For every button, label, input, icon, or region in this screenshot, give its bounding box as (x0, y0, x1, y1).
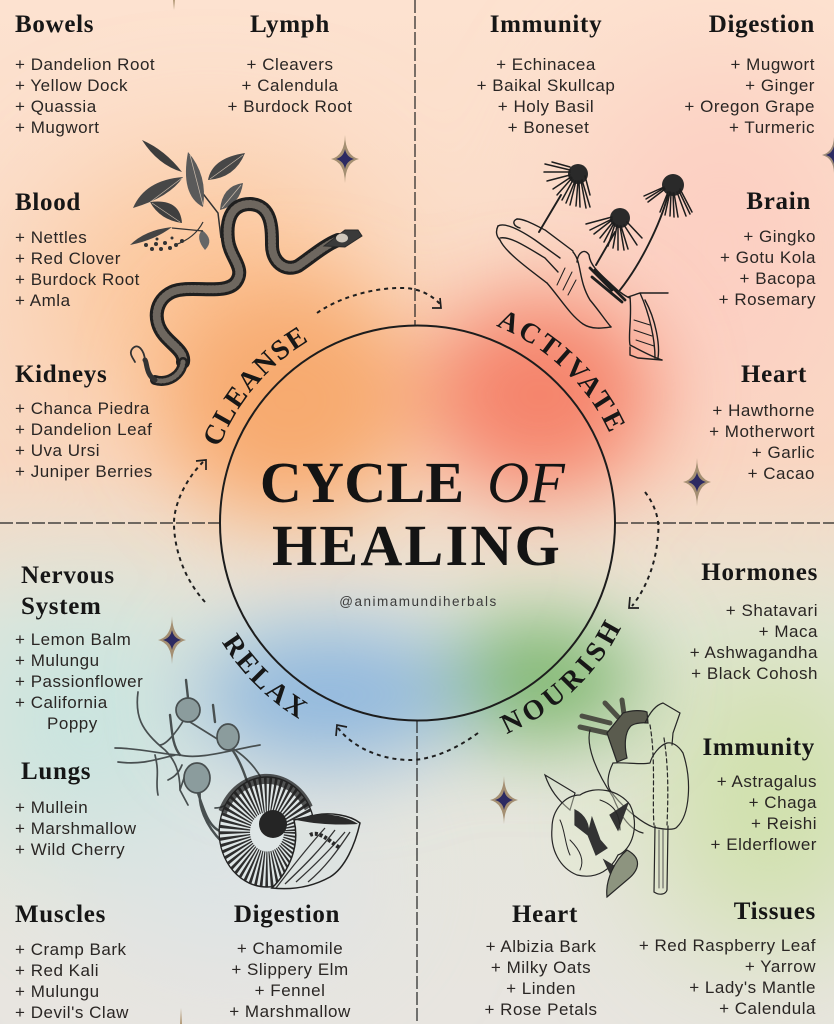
text block: blood: + Red Clover (15, 248, 121, 268)
title: HEALING (272, 513, 562, 578)
text block: nervous system: Nervous (21, 562, 115, 589)
text block: immunity: Immunity (490, 11, 602, 38)
text block: muscles: + Mulungu (15, 982, 100, 1000)
label: nourish: NOURISH (499, 619, 622, 734)
icon: leafy sprig (130, 140, 245, 251)
text block: digestion: + Marshmallow (229, 1002, 351, 1020)
text block: hormones: Hormones (701, 559, 818, 586)
text block: heart: + Garlic (752, 442, 815, 462)
text block: heart: + Rose Petals (484, 1000, 598, 1018)
text block: hormones: + Maca (759, 622, 818, 640)
text block: blood (15, 189, 140, 310)
text block: brain (719, 188, 816, 308)
text block: digestion: + Ginger (745, 76, 815, 95)
title (260, 450, 565, 578)
text block: bowels (15, 11, 155, 137)
text block: blood: + Nettles (15, 228, 87, 246)
text block: digestion: + Fennel (255, 980, 325, 1000)
panel: nourish quadrant (484, 559, 818, 1018)
handle: @animamundiherbals (339, 594, 498, 609)
text block: heart: + Hawthorne (712, 400, 815, 420)
text block: hormones: + Shatavari (726, 600, 818, 620)
text block: lungs: + Wild Cherry (15, 840, 125, 858)
label: relax: RELAX (222, 632, 308, 719)
title: CYCLE OF (260, 450, 565, 515)
text block: heart: + Cacao (748, 464, 815, 482)
text block: digestion (684, 11, 815, 137)
central circle (220, 326, 615, 720)
text block: blood: + Amla (15, 290, 71, 310)
text block: digestion: + Slippery Elm (231, 960, 349, 978)
text block: bowels: + Yellow Dock (15, 76, 128, 95)
text block: lungs (15, 758, 137, 858)
text block: heart: + Motherwort (709, 422, 815, 440)
text block: muscles (15, 901, 129, 1022)
text block: nervous system: System (21, 593, 102, 620)
text block: brain: + Rosemary (719, 290, 816, 308)
curved stage labels (205, 312, 625, 734)
text block: immunity: + Holy Basil (498, 97, 594, 116)
icon: ammonite shell (219, 777, 360, 889)
text block: tissues: + Calendula (719, 998, 816, 1018)
text block: blood: Blood (15, 189, 81, 216)
text block: heart (484, 901, 598, 1018)
text block: digestion (229, 901, 351, 1020)
icon: nerve cells (115, 680, 266, 842)
text block: lungs: Lungs (21, 758, 91, 785)
text block: nervous system: + California (15, 693, 108, 712)
text block: blood: + Burdock Root (15, 270, 140, 288)
text block: muscles: + Devil's Claw (15, 1002, 129, 1022)
label: cleanse: CLEANSE (205, 326, 308, 444)
text block: tissues (639, 898, 816, 1018)
text block: digestion: Digestion (709, 11, 815, 38)
text block: brain: Brain (746, 188, 811, 215)
panel: cleanse quadrant (15, 11, 352, 480)
text block: brain: + Gingko (743, 226, 816, 246)
text block: lymph: + Cleavers (247, 55, 333, 74)
text block: nervous system: + Passionflower (15, 672, 143, 691)
text block: heart: + Milky Oats (491, 958, 591, 976)
text block: lymph: + Burdock Root (228, 97, 352, 116)
text block: tissues: + Red Raspberry Leaf (639, 936, 816, 954)
text block: lymph: Lymph (250, 11, 330, 38)
text block: immunity: + Elderflower (711, 834, 817, 854)
text block: tissues: + Yarrow (745, 956, 816, 976)
text block: digestion: + Mugwort (730, 55, 815, 74)
text block: heart: + Albizia Bark (486, 936, 596, 956)
dashed cycle arrows (174, 288, 658, 760)
text block: brain: + Gotu Kola (720, 248, 816, 266)
icon: snake (131, 204, 362, 381)
text block: kidneys: + Juniper Berries (15, 462, 153, 480)
text block: digestion: Digestion (234, 901, 340, 928)
text block: lymph (228, 11, 352, 116)
text block: immunity: + Reishi (751, 814, 817, 832)
label: activate: ACTIVATE (496, 312, 625, 432)
text block: immunity: + Boneset (508, 118, 589, 137)
text block: digestion: + Turmeric (729, 118, 815, 137)
text block: hormones: + Black Cohosh (691, 664, 818, 682)
text block: bowels: + Dandelion Root (15, 55, 155, 74)
text block: immunity: + Astragalus (717, 772, 817, 790)
icon: sparkle tips at page edges (173, 0, 182, 1024)
text block: heart: Heart (741, 361, 807, 388)
icon: sparkle star, right (683, 458, 711, 506)
text block: immunity (702, 734, 817, 854)
text block: heart (709, 361, 815, 482)
panel: activate quadrant (477, 11, 816, 482)
icon: anatomical heart with rose (545, 700, 689, 897)
text block: lungs: + Mullein (15, 798, 88, 816)
icon: sparkle star, top right edge (822, 137, 834, 173)
text block: digestion: + Oregon Grape (684, 97, 815, 116)
text block: kidneys: + Dandelion Leaf (15, 420, 152, 438)
text block: brain: + Bacopa (740, 268, 816, 288)
text block: kidneys: + Uva Ursi (15, 440, 100, 460)
text block: heart: + Linden (506, 978, 576, 998)
text block: muscles: + Red Kali (15, 960, 99, 980)
text block: bowels: + Mugwort (15, 118, 100, 137)
icon: hand holding echinacea (497, 162, 692, 360)
text block: immunity (477, 11, 615, 137)
text block: immunity: + Chaga (749, 792, 817, 812)
text block: nervous system: + Mulungu (15, 651, 100, 670)
text block: nervous system: + Lemon Balm (15, 630, 131, 649)
text block: immunity: + Echinacea (496, 55, 596, 74)
text block: kidneys: Kidneys (15, 361, 107, 388)
icon: sparkle star, lower right (490, 776, 518, 824)
text block: muscles: Muscles (15, 901, 106, 928)
text block: lungs: + Marshmallow (15, 818, 137, 838)
text block: immunity: Immunity (702, 734, 815, 761)
text block: heart: Heart (512, 901, 578, 928)
text block: immunity: + Baikal Skullcap (477, 76, 615, 95)
icon: sparkle star, top left (331, 135, 359, 183)
text block: digestion: + Chamomile (237, 938, 343, 958)
text block: bowels: + Quassia (15, 97, 97, 116)
text block: nervous system (15, 562, 143, 733)
text block: tissues: + Lady's Mantle (689, 978, 816, 996)
text block: hormones: + Ashwagandha (690, 642, 818, 662)
panel: relax quadrant (15, 562, 351, 1022)
text block: lymph: + Calendula (242, 76, 338, 95)
text block: hormones (690, 559, 818, 682)
text block: nervous system: Poppy (47, 714, 98, 733)
text block: tissues: Tissues (734, 898, 816, 925)
icon: sparkle star, left (158, 616, 186, 664)
text block: kidneys: + Chanca Piedra (15, 398, 150, 418)
text block: kidneys (15, 361, 153, 480)
text block: bowels: Bowels (15, 11, 94, 38)
text block: muscles: + Cramp Bark (15, 940, 127, 958)
